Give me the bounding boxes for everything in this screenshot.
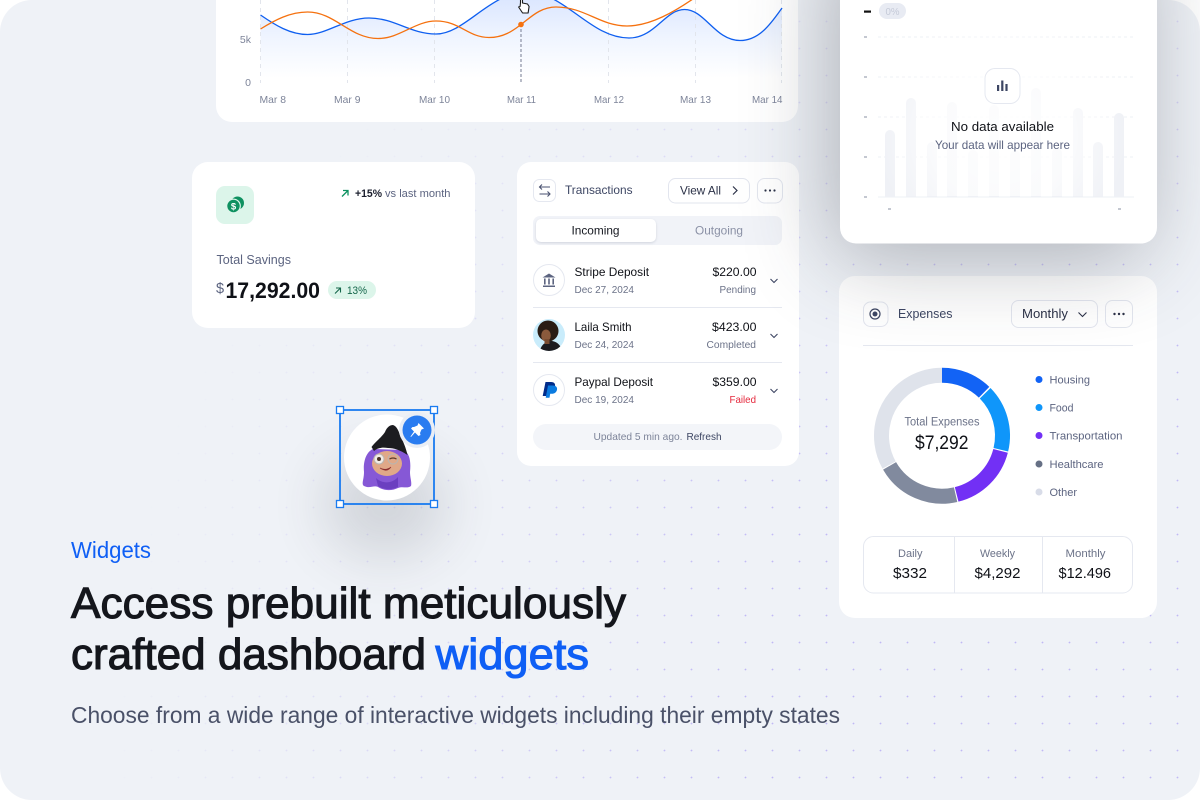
row: laila smith: Dec 24, 2024 bbox=[574, 339, 634, 351]
amount: 17,292.00 bbox=[226, 278, 320, 303]
icon: hand cursor bbox=[519, 0, 529, 13]
row: stripe deposit bbox=[534, 264, 778, 296]
row: paypal deposit: Failed bbox=[730, 394, 756, 406]
icon: bar chart bbox=[985, 68, 1020, 104]
x axis labels: Mar 9 bbox=[334, 94, 361, 106]
x axis labels: Mar 12 bbox=[594, 94, 624, 106]
icon: transfer bbox=[534, 180, 556, 202]
heading: Transactions bbox=[565, 183, 632, 197]
stats table: $12.496 bbox=[1058, 565, 1111, 582]
button: more bbox=[758, 178, 782, 203]
x axis labels bbox=[260, 94, 783, 106]
amount: $ bbox=[216, 281, 224, 297]
empty value: 0% bbox=[886, 7, 900, 18]
footer status: Refresh bbox=[686, 431, 722, 443]
icon: coins: $ bbox=[231, 202, 237, 212]
title: widgets bbox=[434, 630, 589, 679]
donut centre text bbox=[904, 416, 980, 454]
eyebrow: widgets: Widgets bbox=[71, 537, 151, 563]
donut chart bbox=[856, 350, 1028, 521]
trend arrow bbox=[342, 190, 348, 196]
panel: expenses bbox=[839, 276, 1157, 618]
trend text bbox=[355, 188, 450, 200]
avatar widget bbox=[336, 406, 438, 508]
x axis labels: Mar 10 bbox=[419, 94, 450, 106]
button: more bbox=[1106, 300, 1132, 328]
legend: Housing bbox=[1050, 374, 1090, 386]
empty state text: No data available bbox=[951, 119, 1054, 134]
selection handles bbox=[336, 406, 438, 508]
row: laila smith: Completed bbox=[706, 339, 756, 351]
row: laila smith: $423.00 bbox=[712, 320, 757, 334]
stats table bbox=[864, 536, 1132, 593]
row: stripe deposit: Dec 27, 2024 bbox=[574, 284, 634, 296]
active marker line bbox=[520, 24, 522, 83]
dropdown: monthly bbox=[1012, 300, 1098, 328]
y axis labels bbox=[240, 34, 252, 89]
legend: Other bbox=[1050, 487, 1077, 499]
legend: Transportation bbox=[1050, 430, 1122, 442]
chart area fill bbox=[260, 0, 782, 85]
avatar shadow bbox=[323, 453, 447, 557]
x axis labels: Mar 14 bbox=[752, 94, 783, 106]
face bbox=[372, 451, 402, 476]
trend text: +15% bbox=[355, 188, 382, 200]
badge bbox=[328, 281, 376, 299]
row: stripe deposit: Pending bbox=[720, 284, 756, 296]
empty state text: Your data will appear here bbox=[935, 138, 1070, 152]
trend text: vs last month bbox=[385, 188, 450, 200]
x axis labels: Mar 13 bbox=[680, 94, 711, 106]
row: paypal deposit: $359.00 bbox=[712, 375, 757, 389]
panel: line chart card bbox=[216, 0, 798, 122]
row: paypal deposit bbox=[534, 374, 778, 406]
chart gridlines bbox=[260, 0, 782, 83]
dropdown: monthly: Monthly bbox=[1022, 306, 1068, 321]
stats table: $332 bbox=[893, 565, 927, 582]
row: paypal deposit: Paypal Deposit bbox=[574, 375, 654, 389]
row: paypal deposit: Dec 19, 2024 bbox=[574, 394, 634, 406]
x axis labels: Mar 11 bbox=[507, 94, 536, 106]
active point bbox=[518, 22, 524, 27]
stats table: $4,292 bbox=[974, 565, 1020, 582]
panel: empty state chart bbox=[840, 0, 1157, 244]
label: Total Savings bbox=[216, 253, 291, 267]
row: stripe deposit: $220.00 bbox=[712, 265, 757, 279]
stats table: Monthly bbox=[1066, 548, 1106, 560]
row: stripe deposit: Stripe Deposit bbox=[574, 265, 650, 279]
button: view all: View All bbox=[680, 184, 721, 198]
glasses bbox=[374, 454, 384, 464]
footer status: Updated 5 min ago. bbox=[594, 431, 682, 443]
heading: Expenses bbox=[898, 307, 952, 321]
badge: 13% bbox=[347, 285, 367, 297]
blue series bbox=[260, 0, 782, 40]
empty grid bbox=[864, 37, 1134, 209]
top-right card shadow bbox=[832, 0, 1146, 258]
row: laila smith: Laila Smith bbox=[574, 320, 632, 334]
memoji bbox=[363, 425, 411, 490]
panel: total savings bbox=[192, 162, 475, 328]
title bbox=[71, 579, 626, 679]
title: Access prebuilt meticulously bbox=[71, 579, 626, 628]
stats table: Daily bbox=[898, 548, 923, 560]
subtitle: Choose from a wide range of interactive widgets including their empty states bbox=[71, 702, 840, 728]
selection frame bbox=[340, 410, 434, 504]
button: view all bbox=[668, 178, 750, 203]
tabs: Incoming bbox=[572, 224, 620, 238]
icon: expenses bbox=[864, 302, 888, 326]
footer status bbox=[533, 424, 782, 450]
donut centre text: $7,292 bbox=[915, 433, 968, 454]
legend: Healthcare bbox=[1050, 459, 1104, 471]
legend bbox=[1036, 374, 1122, 499]
donut centre text: Total Expenses bbox=[904, 416, 980, 428]
row: laila smith bbox=[533, 319, 778, 351]
orange series bbox=[260, 0, 700, 38]
stats table: Weekly bbox=[980, 548, 1015, 560]
icon: coins bbox=[216, 186, 254, 224]
title: crafted dashboard bbox=[71, 630, 426, 679]
tabs bbox=[533, 216, 782, 245]
hair bbox=[363, 449, 411, 490]
empty value bbox=[864, 3, 906, 19]
empty state text bbox=[935, 119, 1070, 152]
tabs: Outgoing bbox=[695, 224, 743, 238]
x axis labels: Mar 8 bbox=[260, 94, 286, 106]
y axis labels: 0 bbox=[245, 77, 251, 89]
placeholder bars bbox=[885, 88, 1124, 197]
y axis labels: 5k bbox=[240, 34, 252, 46]
legend: Food bbox=[1050, 402, 1074, 414]
beanie bbox=[372, 425, 408, 455]
panel: transactions bbox=[517, 162, 799, 466]
pin badge bbox=[399, 412, 435, 448]
